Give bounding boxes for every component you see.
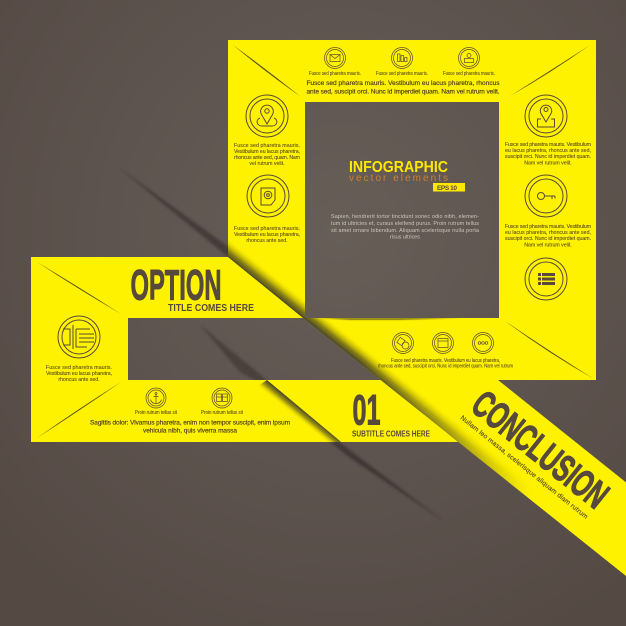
subtitle comes here: SUBTITLE COMES HERE — [352, 430, 431, 438]
icon: profile card — [458, 48, 480, 68]
center paragraph — [331, 214, 479, 240]
icon: list — [525, 258, 567, 300]
bottom text: Fusce sed pharetra mauris. Vestibulum eu lacus pharetra, — [391, 358, 500, 364]
corner cut: top left — [233, 45, 301, 97]
right text 1: Fusce sed pharetra mauris. Vestibulum — [505, 142, 591, 148]
left text 2: Fusce sed pharetra mauris. — [234, 226, 300, 232]
left text 2: Vestibulum eu lacus pharetra, — [234, 232, 300, 238]
corner cut: top right — [510, 45, 590, 96]
option paragraph: vehicula nibh, quis viverra massa — [143, 428, 237, 434]
right text 2 — [505, 224, 591, 248]
option text — [46, 365, 112, 383]
small captions: Proin rutrum tellus sit — [201, 410, 243, 416]
icon: location on map — [525, 95, 567, 137]
option paragraph: Sagittis dolor: Vivamus pharetra, enim non tempor suscipit, enim ipsum — [90, 420, 290, 426]
panel: option strip — [31, 257, 458, 442]
icon: double cards — [212, 388, 232, 408]
badge: EPS 10: EPS 10 — [437, 185, 457, 192]
top captions: Fusce sed pharetra mauris. — [376, 71, 428, 77]
small captions — [135, 410, 243, 416]
icon: envelope — [324, 48, 346, 68]
top captions: Fusce sed pharetra mauris. — [309, 71, 361, 77]
fold shading on frame along the diagonal — [228, 241, 524, 493]
center paragraph: sit amet ornare bibendum. Aliquam scelerisque nulla porta — [331, 228, 479, 234]
left text 1: vel rutrum velit. — [249, 161, 285, 167]
icon: dots — [472, 332, 494, 354]
crease shading on option strip — [259, 380, 341, 442]
corner cut: option bottom left — [37, 382, 121, 438]
right text 1: suscipit orci. Nunc id imperdiet quam. — [505, 154, 591, 160]
conclusion band text — [459, 383, 616, 522]
fold shadow on background, upper left — [118, 167, 233, 257]
top paragraph: ante sed, suscipit orci. Nunc id imperdiet quam. Nam vel rutrum velit. — [306, 88, 500, 96]
center paragraph: Sapien, hendrerit tortor tincidunt sonec odio nibh, elemen- — [331, 214, 479, 220]
subheading: title comes here: TITLE COMES HERE — [168, 303, 254, 314]
right text 1: Nam vel rutrum velit. — [524, 160, 572, 166]
subheading: vector elements: vector elements — [349, 173, 448, 184]
bottom text — [378, 358, 513, 370]
option text: Fusce sed pharetra mauris. — [46, 365, 112, 371]
crease shadow across option gap — [204, 329, 266, 380]
left text 2: rhoncus ante sed. — [246, 238, 288, 244]
crease shadow below the option strip — [331, 442, 432, 512]
right text 2: Fusce sed pharetra mauris. Vestibulum — [505, 224, 591, 230]
left text 1: Vestibulum eu lacus pharetra, — [234, 149, 300, 155]
icon: key — [525, 175, 567, 217]
corner cut: option top left — [37, 262, 121, 314]
icon: document with pin — [247, 175, 289, 217]
top captions — [309, 71, 495, 77]
left text 1: rhoncus ante sed, quam. Nam — [234, 155, 300, 161]
right text 1 — [505, 142, 591, 166]
option text: Vestibulum eu lacus pharetra, — [46, 371, 112, 377]
option text: rhoncus ante sed. — [58, 377, 100, 383]
badge: EPS 10 — [433, 183, 465, 192]
icon: map pin — [246, 95, 288, 137]
top paragraph — [306, 80, 500, 96]
bottom text: rhoncus ante sed, suscipit orci. Nunc id imperdiet quam. Nam vel rutrum — [378, 364, 513, 370]
top paragraph: Fusce sed pharetra mauris. Vestibulum eu lacus pharetra, rhoncus — [306, 80, 500, 87]
panel: upper frame with conclusion band — [228, 40, 626, 576]
icon: bar chart — [392, 48, 412, 68]
corner cut: bottom right — [505, 321, 594, 379]
right text 2: suscipit orci. Nunc id imperdiet quam. — [505, 236, 591, 242]
left text 2 — [234, 226, 300, 244]
left text 1: Fusce sed pharetra mauris. — [234, 143, 300, 149]
right text 2: Nam vel rutrum velit. — [524, 242, 572, 248]
heading: infographic: INFOGRAPHIC — [349, 159, 448, 176]
number 01: 01 — [352, 386, 380, 434]
small captions: Proin rutrum tellus sit — [135, 410, 177, 416]
right text 1: eu lacus pharetra, rhoncus ante sed, — [505, 148, 591, 154]
conclusion subtext: Nullam leo massa, scelerisque aliquam diam rutrum — [459, 415, 589, 521]
center paragraph: tum id ultricies et, cursus eleifend purus. Proin rutrum tellus — [331, 221, 479, 227]
center paragraph: risus ultrices — [390, 234, 420, 240]
icon: shapes — [392, 332, 414, 354]
icon: book — [58, 316, 100, 358]
left text 1 — [234, 143, 300, 167]
heading: option: OPTION — [130, 262, 222, 310]
option paragraph — [90, 420, 290, 434]
top captions: Fusce sed pharetra mauris. — [443, 71, 495, 77]
right text 2: eu lacus pharetra, rhoncus ante sed, — [505, 230, 591, 236]
icon: anchor — [146, 388, 166, 408]
icon: window — [432, 332, 454, 354]
